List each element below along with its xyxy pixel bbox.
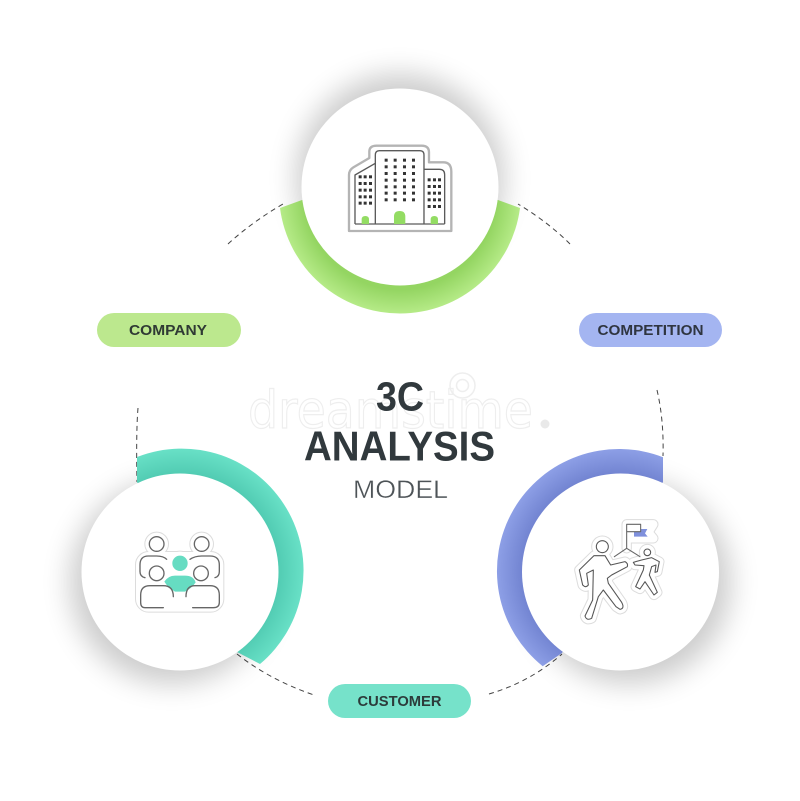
white disc: [302, 88, 498, 286]
circle shadow: [296, 74, 504, 282]
teal ring: [137, 449, 304, 664]
connector: bottom right dashed: [489, 654, 562, 694]
circle shadow: [527, 480, 731, 684]
label: competition: COMPETITION: [598, 323, 704, 339]
label: customer: [328, 684, 471, 718]
icon: team meeting: [140, 537, 219, 608]
label: company: [97, 313, 241, 347]
green ring: [280, 200, 520, 313]
icon: leader with flag: [579, 524, 659, 619]
label: customer: CUSTOMER: [358, 694, 442, 710]
watermark: dreamstime: [248, 381, 533, 441]
circle shadow: [70, 480, 274, 684]
heading: MODEL: MODEL: [353, 476, 448, 504]
connector: bottom left dashed: [237, 654, 314, 695]
heading: ANALYSIS: ANALYSIS: [304, 422, 495, 470]
panel: customer circle: [70, 449, 304, 684]
blue ring: [497, 449, 663, 666]
connector: top right dashed: [518, 204, 570, 244]
label: competition: [579, 313, 722, 347]
icon: buildings: [349, 146, 451, 231]
panel: company circle: [280, 74, 520, 313]
heading: 3C: 3C: [376, 374, 424, 420]
white disc: [82, 474, 278, 670]
label: company: COMPANY: [129, 323, 207, 339]
panel: competition circle: [497, 449, 731, 684]
title: [304, 374, 495, 504]
connector: left dashed: [137, 408, 138, 482]
white disc: [522, 474, 719, 670]
connector: right dashed: [657, 390, 663, 456]
connector: top left dashed: [228, 204, 283, 244]
